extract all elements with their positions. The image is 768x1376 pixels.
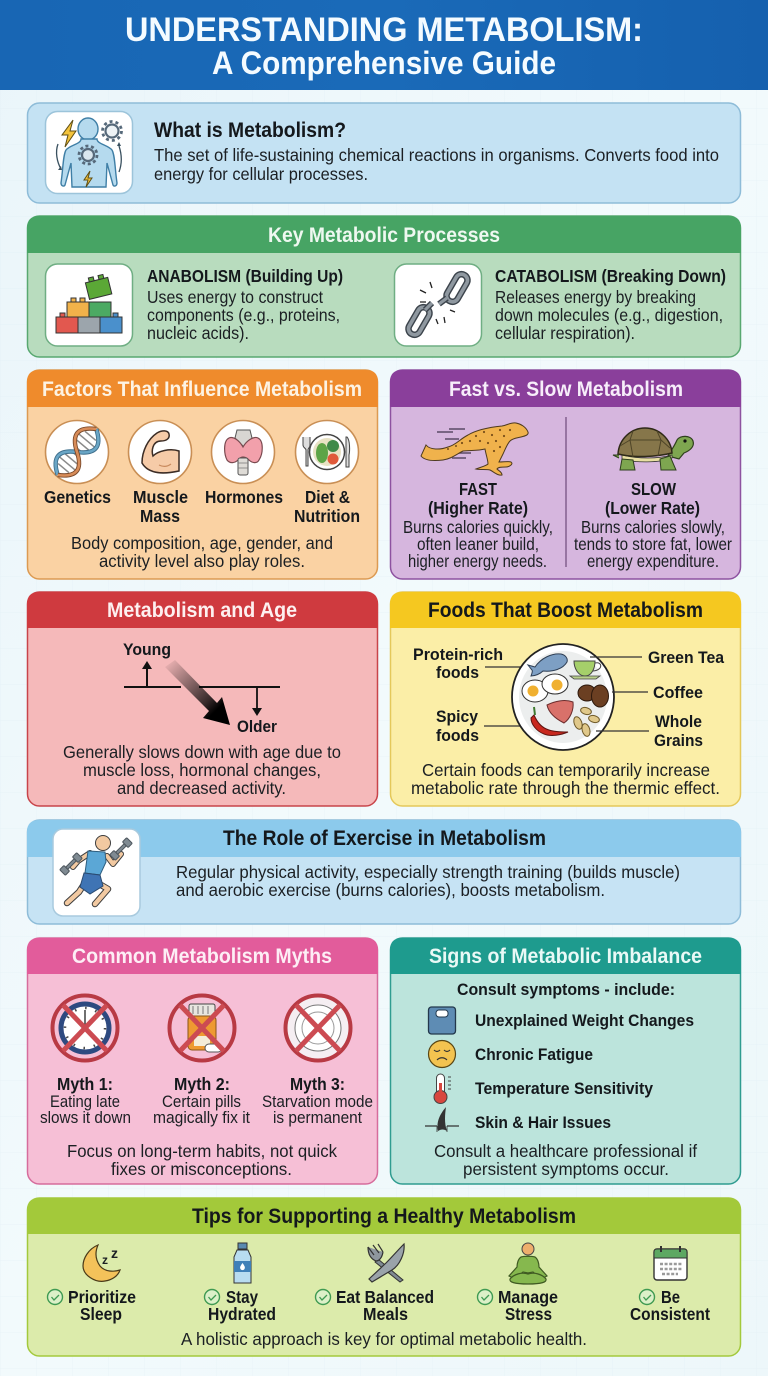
- age note: Generally slows down with age due to: [63, 742, 341, 762]
- signs note: [434, 1141, 697, 1179]
- panel: factors that influence metabolism: [27, 370, 378, 579]
- icon: crossed plate: [286, 996, 350, 1060]
- icon: body with gears: [46, 112, 132, 194]
- foods note: metabolic rate through the thermic effect.: [411, 778, 720, 798]
- slow column: energy expenditure.: [587, 551, 719, 571]
- icon: crossed pill bottle: [170, 996, 234, 1060]
- panel: fast vs slow metabolism: [390, 370, 741, 579]
- icon: broken chain: [394, 264, 482, 346]
- heading: What is Metabolism?: [154, 119, 346, 142]
- anabolism text: [147, 266, 343, 343]
- myth 1: [40, 1074, 131, 1127]
- icon: hair follicle: [425, 1107, 459, 1132]
- tip: eat balanced meals: Meals: [363, 1304, 408, 1324]
- anabolism text: nucleic acids).: [147, 323, 249, 343]
- myth 2: magically fix it: [153, 1109, 250, 1127]
- food labels: [413, 645, 725, 750]
- icon: thermometer: [434, 1074, 451, 1104]
- myth 3: is permanent: [273, 1109, 362, 1127]
- food labels: Coffee: [653, 683, 703, 702]
- age chart: [123, 640, 280, 736]
- myth 1: Myth 1:: [57, 1074, 113, 1094]
- symptom: skin and hair: Skin & Hair Issues: [475, 1113, 611, 1132]
- panel: metabolism and age: [27, 592, 378, 806]
- slow column: tends to store fat, lower: [574, 534, 732, 554]
- icon: tired face: [428, 1040, 456, 1068]
- anabolism text: ANABOLISM (Building Up): [147, 266, 343, 286]
- heading: Tips for Supporting a Healthy Metabolism: [192, 1205, 576, 1228]
- icon: diet plate: [296, 420, 358, 484]
- title banner: A Comprehensive Guide: [212, 45, 556, 81]
- myths note: Focus on long-term habits, not quick: [67, 1141, 337, 1161]
- description: [154, 145, 719, 184]
- slow column: Burns calories slowly,: [581, 517, 725, 537]
- heading: Key Metabolic Processes: [268, 224, 500, 247]
- catabolism text: cellular respiration).: [495, 323, 635, 343]
- description: and aerobic exercise (burns calories), boosts metabolism.: [176, 880, 605, 900]
- food plate diagram: [484, 644, 649, 750]
- myth 1: Eating late: [50, 1093, 120, 1111]
- icon: moon: [83, 1245, 120, 1281]
- catabolism text: [495, 266, 726, 343]
- catabolism text: CATABOLISM (Breaking Down): [495, 266, 726, 286]
- foods note: Certain foods can temporarily increase: [422, 760, 710, 780]
- icon: calendar: [654, 1246, 687, 1280]
- myths note: fixes or misconceptions.: [111, 1159, 292, 1179]
- myth 1: slows it down: [40, 1109, 131, 1127]
- food labels: foods: [436, 663, 479, 682]
- anabolism text: Uses energy to construct: [147, 287, 323, 307]
- factors note: activity level also play roles.: [99, 551, 305, 571]
- symptom: weight: Unexplained Weight Changes: [475, 1011, 694, 1030]
- intro line: Consult symptoms - include:: [457, 980, 675, 999]
- icon: thyroid: [212, 420, 274, 484]
- tip: be consistent: Consistent: [630, 1304, 710, 1324]
- food labels: Grains: [654, 731, 703, 750]
- factor labels: Mass: [140, 506, 180, 526]
- myth 3: Starvation mode: [262, 1093, 373, 1111]
- panel: signs of metabolic imbalance: [390, 938, 741, 1184]
- icon: DNA: [46, 420, 108, 484]
- heading: The Role of Exercise in Metabolism: [223, 827, 546, 850]
- factor labels: [44, 487, 360, 526]
- icon: moon: z: [102, 1253, 108, 1267]
- slow column: (Lower Rate): [605, 498, 700, 518]
- tip: prioritize sleep: [48, 1287, 136, 1324]
- factor labels: Nutrition: [294, 506, 360, 526]
- factor labels: Hormones: [205, 487, 283, 507]
- panel: what is metabolism: [28, 103, 740, 203]
- factor labels: Diet &: [305, 487, 350, 507]
- icon: cheetah: [421, 423, 528, 475]
- panel: foods that boost metabolism: [390, 592, 741, 806]
- tip: manage stress: Stress: [505, 1304, 552, 1324]
- myth 3: Myth 3:: [290, 1074, 345, 1094]
- fast column: Burns calories quickly,: [403, 517, 553, 537]
- myth 3: [262, 1074, 373, 1127]
- symptom: temperature: Temperature Sensitivity: [475, 1079, 653, 1098]
- myth 2: Myth 2:: [174, 1074, 230, 1094]
- heading: Metabolism and Age: [107, 599, 297, 622]
- icon: scale: [428, 1007, 456, 1034]
- title banner: [0, 0, 768, 90]
- heading: Signs of Metabolic Imbalance: [429, 945, 702, 968]
- fast column: FAST: [459, 479, 497, 499]
- anabolism text: components (e.g., proteins,: [147, 305, 340, 325]
- fast column: higher energy needs.: [408, 551, 547, 571]
- fast column: often leaner build,: [417, 534, 539, 554]
- food labels: Spicy: [436, 707, 479, 726]
- icon: turtle: [613, 428, 693, 470]
- signs note: Consult a healthcare professional if: [434, 1141, 697, 1161]
- tip: eat balanced meals: [316, 1287, 434, 1324]
- tip: manage stress: [478, 1287, 558, 1324]
- panel: tips for a healthy metabolism: [27, 1198, 741, 1356]
- description: Regular physical activity, especially strength training (builds muscle): [176, 862, 680, 882]
- tip: eat balanced meals: Eat Balanced: [336, 1287, 434, 1307]
- factors note: Body composition, age, gender, and: [71, 533, 333, 553]
- heading: Common Metabolism Myths: [72, 945, 332, 968]
- signs note: persistent symptoms occur.: [463, 1159, 669, 1179]
- tip: be consistent: [630, 1287, 710, 1324]
- icon: moon: z: [111, 1245, 118, 1261]
- age note: and decreased activity.: [117, 778, 286, 798]
- myth 2: [153, 1074, 250, 1127]
- factor labels: Genetics: [44, 487, 111, 507]
- age note: [63, 742, 341, 798]
- panel: key metabolic processes: [27, 216, 741, 357]
- icon: meditating person: [509, 1243, 547, 1284]
- tip: manage stress: Manage: [498, 1287, 558, 1307]
- factors note: [71, 533, 333, 571]
- fast column: [403, 479, 553, 571]
- food labels: Whole: [655, 712, 702, 731]
- age chart: Young: [123, 640, 171, 659]
- food labels: foods: [436, 726, 479, 745]
- symptom: fatigue: Chronic Fatigue: [475, 1045, 593, 1064]
- description: energy for cellular processes.: [154, 164, 368, 184]
- heading: Fast vs. Slow Metabolism: [449, 378, 683, 401]
- icon: crossed clock: [52, 996, 118, 1060]
- factor labels: Muscle: [133, 487, 188, 507]
- tip: prioritize sleep: Prioritize: [68, 1287, 136, 1307]
- slow column: [574, 479, 732, 571]
- tip: stay hydrated: Hydrated: [208, 1304, 276, 1324]
- heading: Foods That Boost Metabolism: [428, 599, 703, 622]
- icon: runner with dumbbells: [53, 829, 140, 916]
- tip: be consistent: Be: [661, 1287, 680, 1307]
- icon: fork and knife: [368, 1244, 404, 1282]
- age chart: Older: [237, 717, 277, 736]
- food labels: Green Tea: [648, 648, 725, 667]
- panel: common metabolism myths: [27, 938, 378, 1184]
- catabolism text: down molecules (e.g., digestion,: [495, 305, 723, 325]
- tip: stay hydrated: Stay: [226, 1287, 258, 1307]
- foods note: [411, 760, 720, 798]
- fast column: (Higher Rate): [428, 498, 528, 518]
- title banner: UNDERSTANDING METABOLISM:: [125, 11, 643, 49]
- heading: Factors That Influence Metabolism: [42, 378, 362, 401]
- icon: muscle: [128, 420, 192, 484]
- panel: role of exercise: [27, 820, 741, 924]
- slow column: SLOW: [631, 479, 676, 499]
- myth 2: Certain pills: [162, 1093, 241, 1111]
- tip: prioritize sleep: Sleep: [80, 1304, 122, 1324]
- icon: building blocks: [46, 264, 132, 346]
- description: [176, 862, 680, 900]
- age note: muscle loss, hormonal changes,: [83, 760, 321, 780]
- tips note: A holistic approach is key for optimal metabolic health.: [181, 1329, 587, 1349]
- catabolism text: Releases energy by breaking: [495, 287, 696, 307]
- icon: water bottle: [234, 1243, 251, 1283]
- food labels: Protein-rich: [413, 645, 503, 664]
- tip: stay hydrated: [204, 1287, 276, 1324]
- description: The set of life-sustaining chemical reactions in organisms. Converts food into: [154, 145, 719, 165]
- myths note: [67, 1141, 337, 1179]
